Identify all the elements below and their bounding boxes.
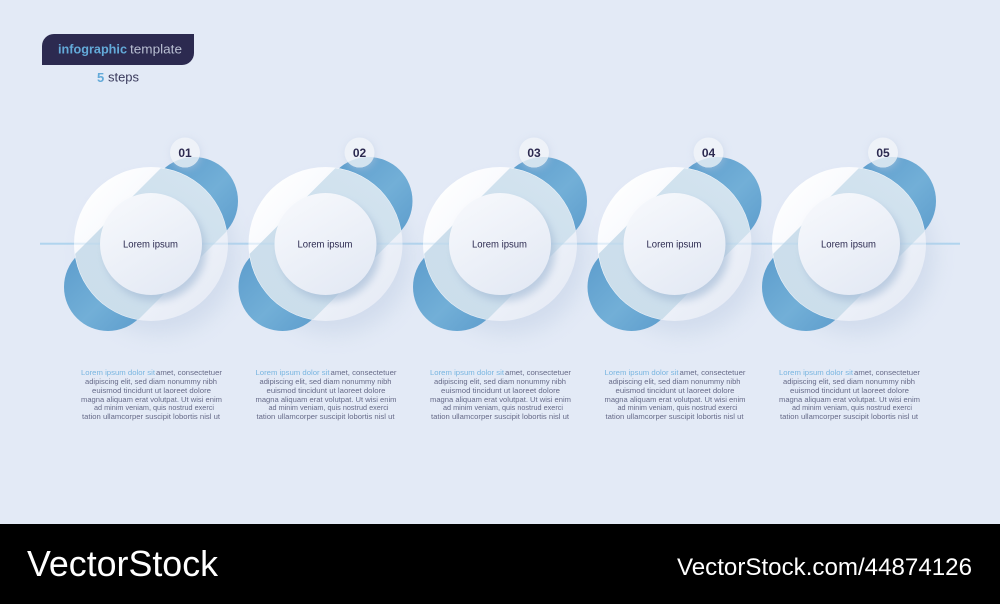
description: tation ullamcorper suscipit lobortis nisl ut (606, 412, 744, 421)
description: adipiscing elit, sed diam nonummy nibh (260, 377, 392, 386)
description: tation ullamcorper suscipit lobortis nisl ut (256, 412, 394, 421)
blue circles (238, 157, 412, 331)
description (256, 368, 397, 421)
step 3 (413, 138, 587, 420)
step 2 (238, 138, 412, 420)
description: magna aliquam erat volutpat. Ut wisi enim (779, 395, 920, 404)
description: magna aliquam erat volutpat. Ut wisi enim (430, 395, 571, 404)
number badge: 03 (527, 146, 541, 160)
title badge: infographic (58, 42, 127, 56)
shadow (258, 182, 410, 334)
description: ad minim veniam, quis nostrud exerci (618, 403, 738, 412)
description: ad minim veniam, quis nostrud exerci (443, 403, 563, 412)
description: ad minim veniam, quis nostrud exerci (268, 403, 389, 412)
number badge (519, 138, 552, 172)
description: ad minim veniam, quis nostrud exerci (792, 403, 912, 412)
description: euismod tincidunt ut laoreet dolore (92, 386, 211, 395)
footer bar (0, 524, 1000, 604)
subtitle: steps (108, 70, 139, 84)
description: euismod tincidunt ut laoreet dolore (790, 386, 909, 395)
number badge (694, 138, 726, 172)
description: adipiscing elit, sed diam nonummy nibh (608, 377, 740, 386)
description: amet, consectetuer (680, 368, 746, 377)
number badge: 02 (353, 146, 366, 160)
shadow (433, 182, 585, 334)
inner circle: Lorem ipsum (646, 240, 702, 250)
description: ad minim veniam, quis nostrud exerci (94, 403, 214, 412)
description: amet, consectetuer (505, 368, 572, 377)
description: amet, consectetuer (854, 368, 921, 377)
blue circles (762, 157, 936, 331)
footer url: VectorStock.com/44874126 (677, 554, 972, 581)
number badge: 04 (702, 146, 715, 160)
description: Lorem ipsum dolor sit (81, 368, 155, 377)
blue circles (588, 157, 762, 331)
glass disc (598, 167, 752, 321)
shadow (84, 182, 236, 334)
description: magna aliquam erat volutpat. Ut wisi enim (604, 395, 746, 404)
step 4 (588, 138, 762, 420)
title badge: template (130, 42, 182, 56)
glass disc (248, 167, 402, 321)
description: Lorem ipsum dolor sit (256, 368, 330, 377)
subtitle: 5 (97, 70, 104, 85)
number badge: 01 (178, 146, 192, 160)
description: magna aliquam erat volutpat. Ut wisi enim (256, 395, 396, 404)
glass disc (423, 167, 577, 321)
description: euismod tincidunt ut laoreet dolore (441, 386, 560, 395)
header (42, 34, 194, 85)
timeline line (40, 243, 960, 245)
step 1 (64, 138, 238, 420)
blue circles (413, 157, 587, 331)
description: tation ullamcorper suscipit lobortis nisl ut (82, 412, 220, 421)
inner circle (624, 193, 730, 301)
footer logo: VectorStock (27, 543, 219, 584)
inner circle: Lorem ipsum (821, 240, 876, 250)
shadow (782, 182, 934, 334)
description: Lorem ipsum dolor sit (430, 368, 504, 377)
inner circle (100, 193, 206, 301)
inner circle (449, 193, 555, 301)
inner circle (274, 193, 380, 301)
description: adipiscing elit, sed diam nonummy nibh (85, 377, 217, 386)
description: tation ullamcorper suscipit lobortis nisl ut (431, 412, 569, 421)
title badge (42, 34, 194, 65)
description: adipiscing elit, sed diam nonummy nibh (783, 377, 915, 386)
blue circles (64, 157, 238, 331)
description: Lorem ipsum dolor sit (779, 368, 853, 377)
number badge: 05 (876, 146, 890, 160)
description (604, 368, 746, 421)
glass disc (74, 167, 228, 321)
number badge (344, 138, 378, 172)
description: tation ullamcorper suscipit lobortis nisl ut (780, 412, 918, 421)
description: euismod tincidunt ut laoreet dolore (616, 386, 734, 395)
inner circle: Lorem ipsum (298, 240, 352, 250)
shadow (608, 182, 760, 334)
description: amet, consectetuer (156, 368, 223, 377)
description: magna aliquam erat volutpat. Ut wisi enim (81, 395, 222, 404)
description (81, 368, 223, 421)
description: Lorem ipsum dolor sit (604, 368, 678, 377)
number badge (170, 138, 203, 172)
inner circle: Lorem ipsum (123, 240, 178, 250)
inner circle (798, 193, 904, 301)
inner circle: Lorem ipsum (472, 240, 527, 250)
glass disc (772, 167, 926, 321)
description: adipiscing elit, sed diam nonummy nibh (434, 377, 566, 386)
description (430, 368, 572, 421)
description: amet, consectetuer (330, 368, 397, 377)
step 5 (762, 138, 936, 420)
description (779, 368, 921, 421)
description: euismod tincidunt ut laoreet dolore (266, 386, 386, 395)
number badge (868, 138, 901, 172)
